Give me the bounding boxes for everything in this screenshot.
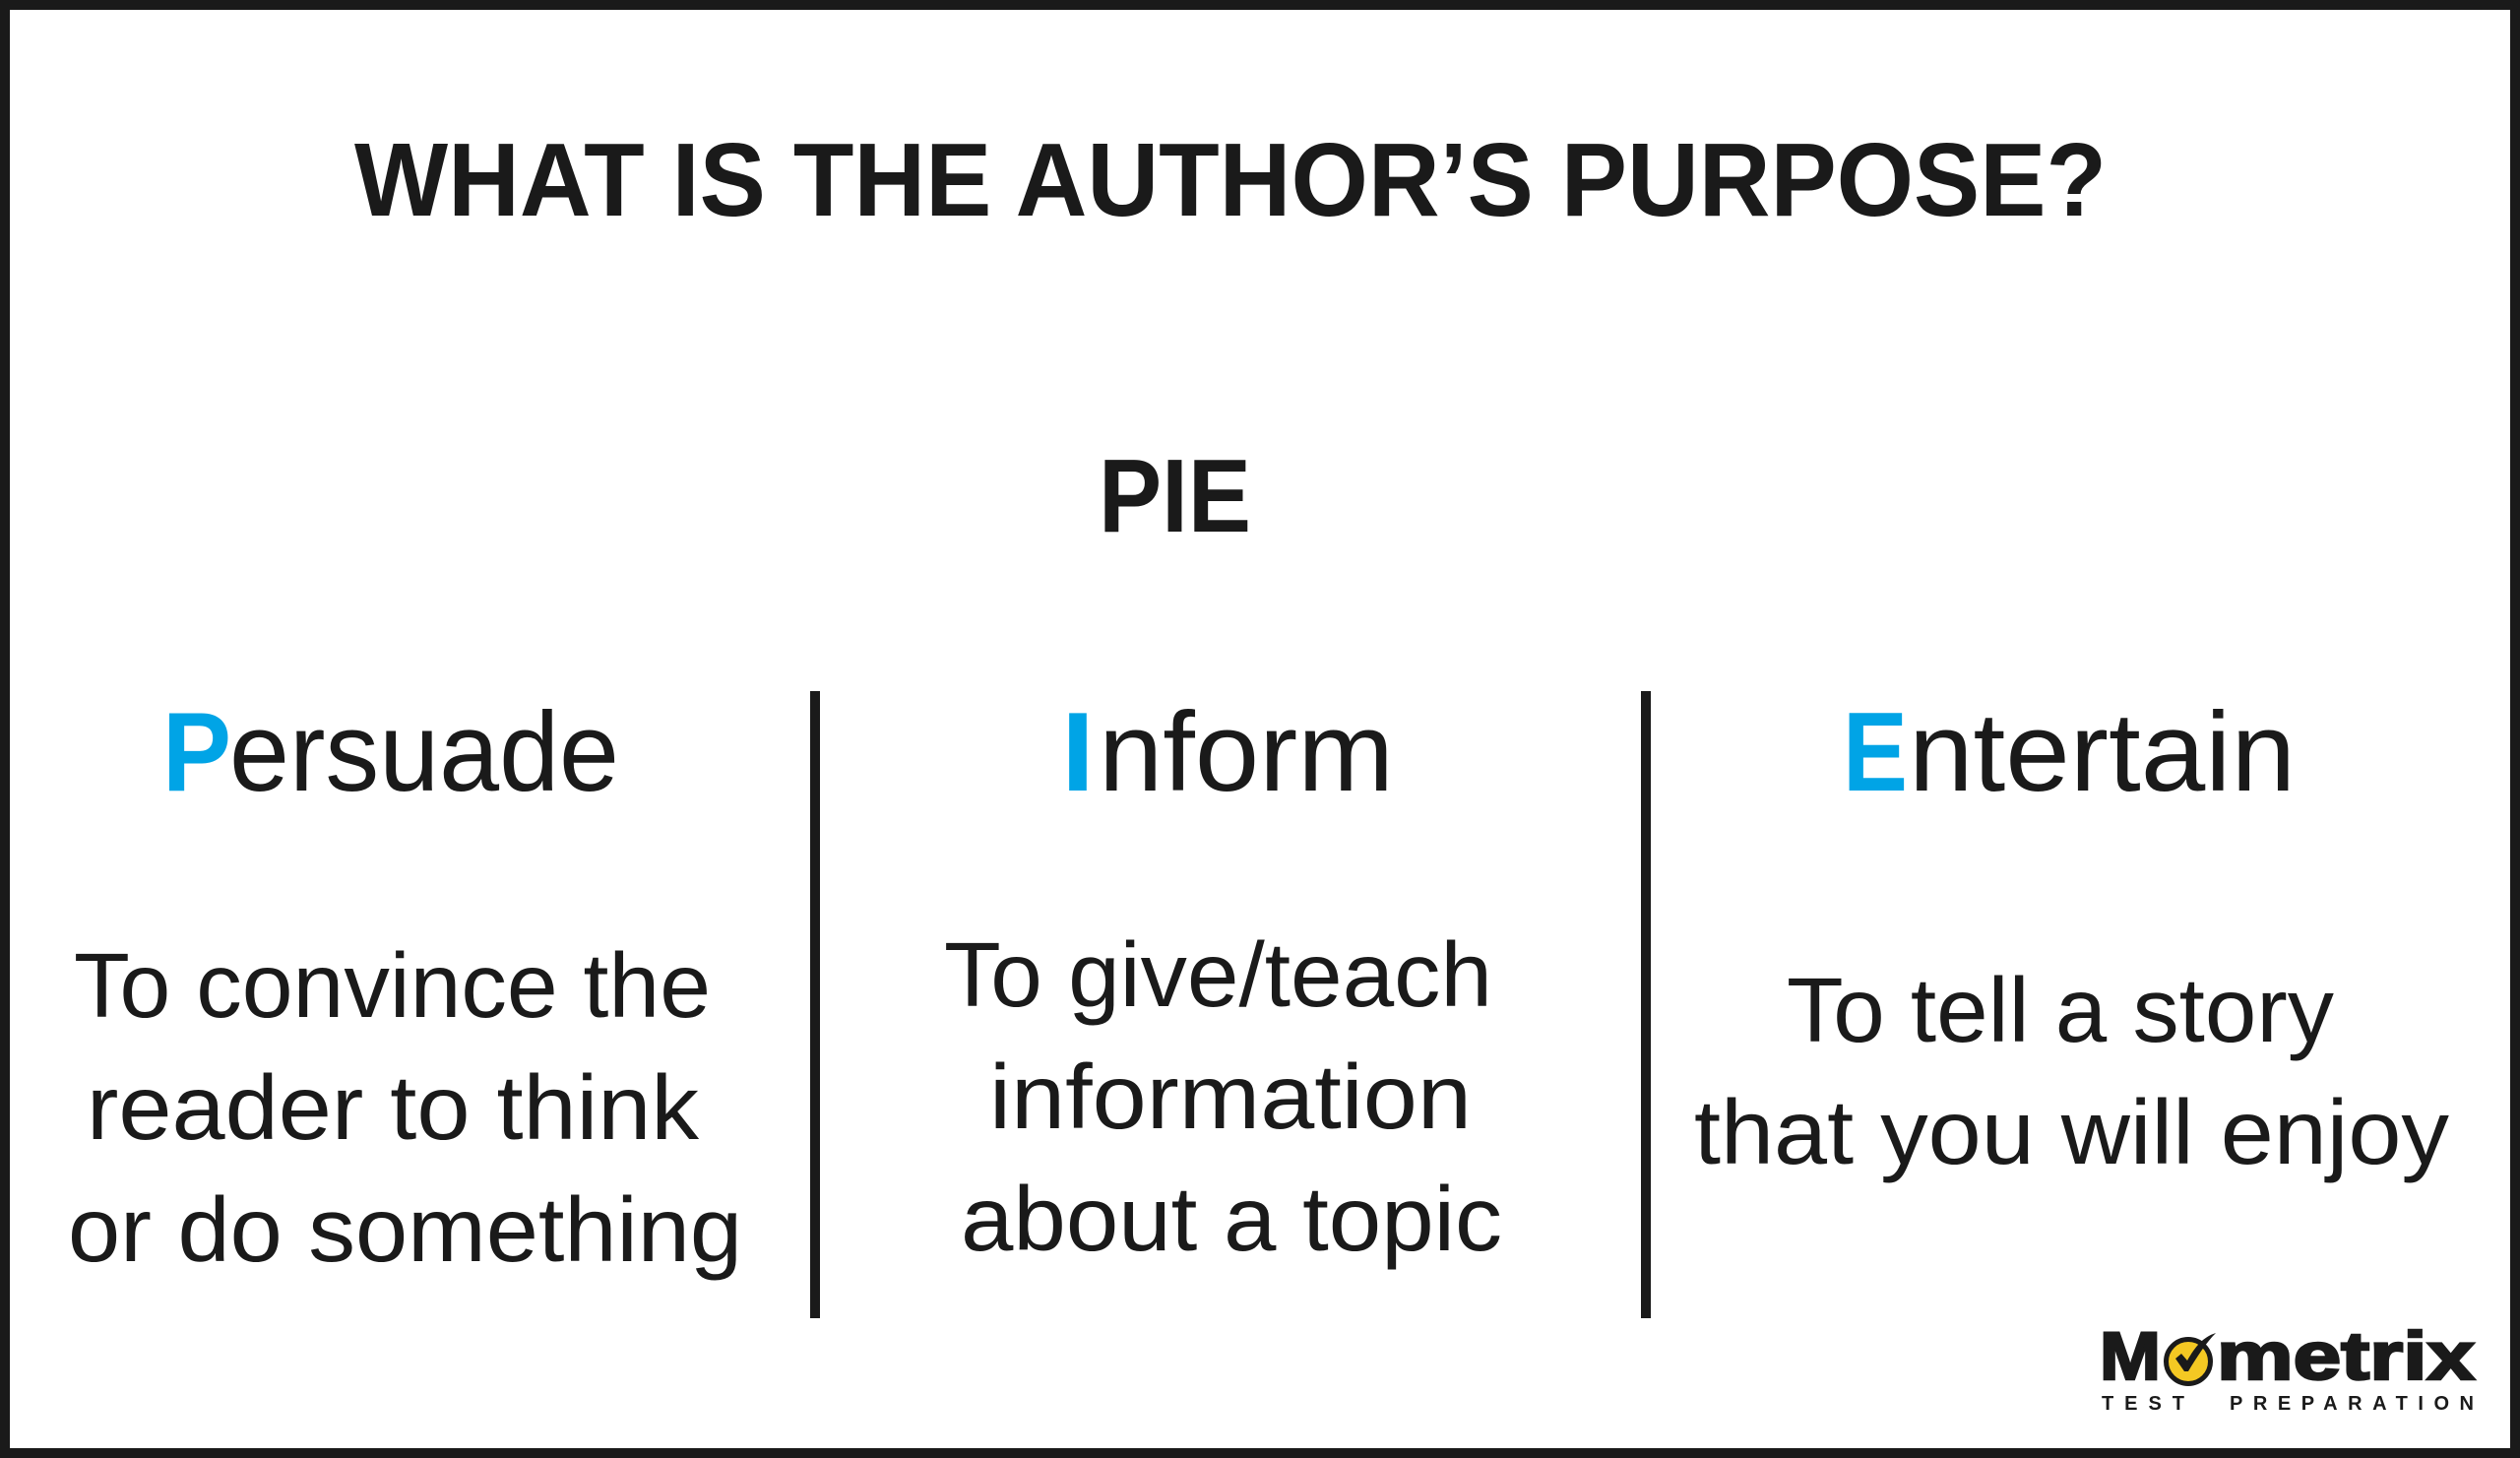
panel: entertain (1694, 690, 2450, 1183)
divider: right (1641, 691, 1651, 1318)
logo: Mometrix Test Preparation (2100, 1318, 2475, 1415)
text block: persuade description (68, 934, 742, 1281)
text block: inform description: To give/teach (944, 923, 1492, 1026)
heading: Inform: nform (1099, 690, 1394, 815)
logo tagline (2102, 1393, 2474, 1415)
text block: persuade description: reader to think (87, 1056, 700, 1159)
text block: entertain description (1694, 959, 2450, 1183)
heading: Persuade: P (162, 690, 231, 815)
logo tagline: PREPARATION (2230, 1393, 2474, 1415)
icon: yellow check circle (2166, 1333, 2216, 1384)
panel: inform (944, 690, 1502, 1270)
text block: entertain description: To tell a story (1787, 959, 2335, 1061)
heading: PIE acronym: PIE (1099, 438, 1251, 554)
logo wordmark: M (2100, 1318, 2161, 1394)
text block: inform description: information (989, 1046, 1472, 1148)
logo tagline: TEST (2102, 1393, 2184, 1415)
heading: Entertain: ntertain (1909, 690, 2296, 815)
divider: left (810, 691, 820, 1318)
text block: persuade description: or do something (68, 1178, 742, 1281)
heading: Entertain: E (1843, 690, 1908, 815)
text block: inform description (944, 923, 1502, 1270)
panel: persuade (68, 690, 742, 1281)
text block: persuade description: To convince the (74, 934, 711, 1037)
title: WHAT IS THE AUTHOR’S PURPOSE? (354, 122, 2107, 238)
heading: Inform: I (1061, 690, 1095, 815)
heading: Persuade: ersuade (229, 690, 619, 815)
text block: entertain description: that you will enjoy (1694, 1081, 2450, 1183)
text block: inform description: about a topic (961, 1168, 1502, 1270)
logo wordmark: metrix (2217, 1318, 2475, 1394)
logo wordmark (2100, 1318, 2475, 1394)
